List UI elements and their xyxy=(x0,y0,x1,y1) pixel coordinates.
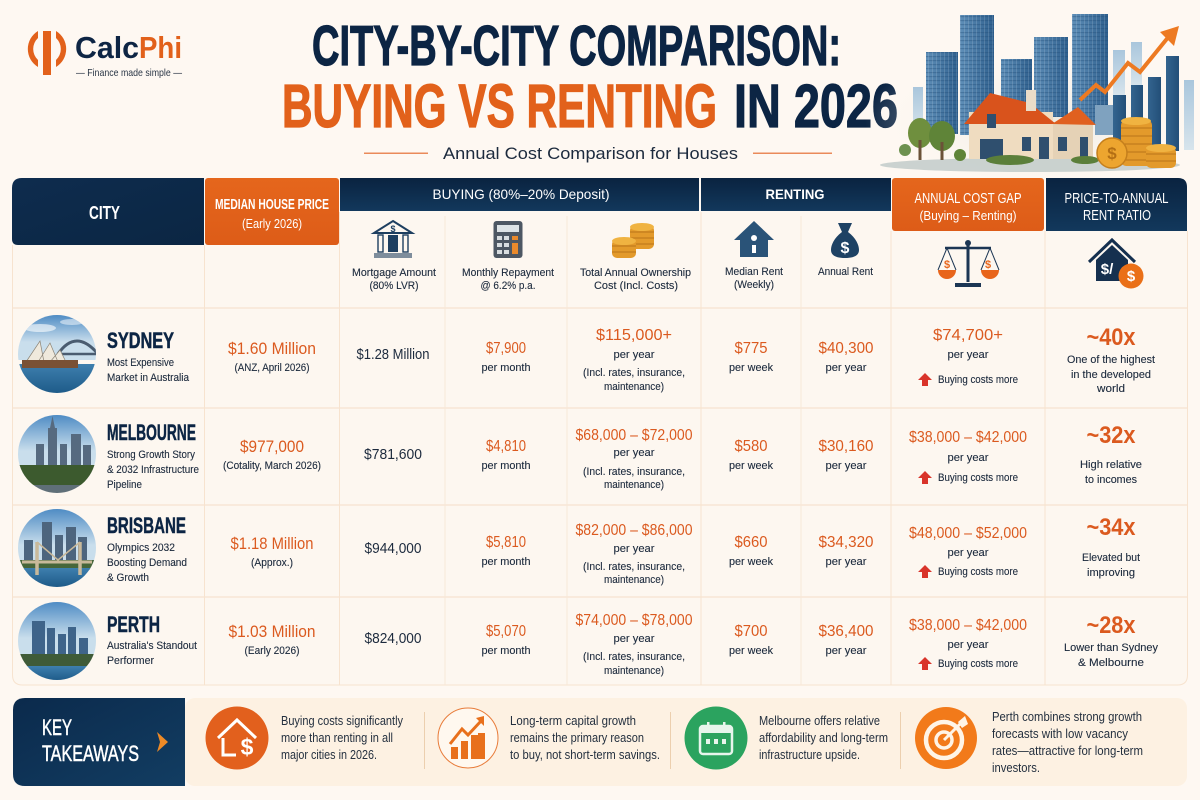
row: Perth: $700 xyxy=(734,623,768,640)
header: buying: BUYING (80%–20% Deposit) xyxy=(432,186,610,202)
row: Perth: $1.03 Million xyxy=(228,623,316,641)
CalcPhi logo: — Finance made simple — xyxy=(76,67,182,79)
sub-header labels: Cost (Incl. Costs) xyxy=(594,280,678,292)
row: Sydney: per year xyxy=(614,349,655,361)
row: Brisbane: (Incl. rates, insurance, xyxy=(583,561,685,573)
row: Perth: $38,000 – $42,000 xyxy=(909,617,1027,634)
row: Brisbane: $1.18 Million xyxy=(230,535,314,553)
row: Brisbane: $48,000 – $52,000 xyxy=(909,525,1027,542)
icon: balance scales xyxy=(938,240,999,287)
icon: balance scales: $ xyxy=(944,259,950,271)
row: Brisbane: $34,320 xyxy=(818,534,874,551)
row: Brisbane: improving xyxy=(1087,567,1135,579)
row: Perth: Buying costs more xyxy=(938,658,1018,670)
title: BUYING VS RENTING xyxy=(282,72,717,140)
row: Sydney: world xyxy=(1096,383,1125,395)
icon: money bag: $ xyxy=(841,240,850,257)
takeaway 3: affordability and long-term xyxy=(759,731,888,745)
row: Brisbane: $82,000 – $86,000 xyxy=(576,522,693,539)
row: Sydney: (Incl. rates, insurance, xyxy=(583,367,685,379)
row: Brisbane: maintenance) xyxy=(604,574,664,586)
sub-header labels: Mortgage Amount xyxy=(352,267,436,279)
title: CITY-BY-CITY COMPARISON: xyxy=(312,14,841,78)
row: Sydney: maintenance) xyxy=(604,381,664,393)
icon: bank: $ xyxy=(390,224,396,234)
row: Sydney: $115,000+ xyxy=(596,327,672,344)
takeaway 3: infrastructure upside. xyxy=(759,748,860,762)
row: Sydney: Most Expensive xyxy=(107,357,174,369)
takeaway 1: more than renting in all xyxy=(281,731,393,745)
icon: price to rent: $ xyxy=(1127,268,1136,285)
row: Brisbane: (Approx.) xyxy=(251,557,293,569)
row: Melbourne: Strong Growth Story xyxy=(107,449,195,461)
row: Perth: $36,400 xyxy=(818,623,874,640)
header: annual cost gap: (Buying – Renting) xyxy=(920,208,1016,223)
icon: rent house xyxy=(734,221,774,257)
row: Sydney: per year xyxy=(948,349,989,361)
takeaway 4: investors. xyxy=(992,761,1040,775)
row: Melbourne: (Incl. rates, insurance, xyxy=(583,466,685,478)
row: Melbourne: $4,810 xyxy=(486,438,526,455)
subtitle: Annual Cost Comparison for Houses xyxy=(443,144,738,163)
header: renting xyxy=(701,178,891,211)
takeaway 1: Buying costs significantly xyxy=(281,714,404,728)
row: Brisbane: Olympics 2032 xyxy=(107,542,175,554)
title xyxy=(282,14,898,140)
header: price-to-annual rent ratio xyxy=(1046,178,1187,231)
row: Sydney: $7,900 xyxy=(486,340,526,357)
row: Sydney: per year xyxy=(826,362,867,374)
header: city xyxy=(12,178,204,245)
sub-header labels: @ 6.2% p.a. xyxy=(480,280,536,292)
CalcPhi logo: Calc xyxy=(75,30,139,65)
sub-header labels: Total Annual Ownership xyxy=(580,267,691,279)
row: Brisbane: per year xyxy=(948,547,989,559)
sub-header labels: Monthly Repayment xyxy=(462,267,554,279)
row: Melbourne: (Cotality, March 2026) xyxy=(223,460,321,472)
header: annual cost gap: ANNUAL COST GAP xyxy=(914,191,1022,207)
sub-header labels: (80% LVR) xyxy=(370,280,418,292)
icon: price to rent: $/ xyxy=(1101,261,1114,278)
header: median house price: (Early 2026) xyxy=(242,216,302,231)
row: Brisbane: Elevated but xyxy=(1082,552,1140,564)
row: Brisbane: ~34x xyxy=(1086,514,1136,541)
row: Melbourne: $30,160 xyxy=(818,438,874,455)
sub-header labels: Median Rent xyxy=(725,266,783,278)
row: Perth: maintenance) xyxy=(604,665,664,677)
takeaway 1: $ xyxy=(241,734,254,760)
table body panel xyxy=(12,211,1188,685)
row: Brisbane xyxy=(18,509,1140,587)
row: Melbourne: $977,000 xyxy=(240,438,304,456)
row: Perth: per year xyxy=(826,645,867,657)
header: buying xyxy=(340,178,699,211)
row: Brisbane: $944,000 xyxy=(364,541,422,557)
takeaway 2: to buy, not short-term savings. xyxy=(510,748,660,762)
takeaway 2: Long-term capital growth xyxy=(510,714,636,728)
row: Melbourne: $68,000 – $72,000 xyxy=(576,427,693,444)
row: Brisbane: $660 xyxy=(734,534,768,551)
row: Sydney: $775 xyxy=(734,340,768,357)
row: Melbourne: $38,000 – $42,000 xyxy=(909,429,1027,446)
row: Melbourne: $580 xyxy=(734,438,768,455)
row: Brisbane: Boosting Demand xyxy=(107,557,187,569)
row: Brisbane: & Growth xyxy=(107,572,149,584)
row: Sydney: Buying costs more xyxy=(938,374,1018,386)
row: Perth: per month xyxy=(482,645,530,657)
row: Melbourne: to incomes xyxy=(1085,474,1137,486)
row: Sydney xyxy=(18,315,1155,395)
row: Brisbane: per year xyxy=(614,543,655,555)
sub-header labels: (Weekly) xyxy=(734,279,774,291)
header: price-to-annual rent ratio: RENT RATIO xyxy=(1083,208,1151,224)
row: Perth: Performer xyxy=(107,655,154,667)
takeaway 3: Melbourne offers relative xyxy=(759,714,880,728)
photo: Melbourne xyxy=(18,415,96,494)
row: Perth: Lower than Sydney xyxy=(1064,642,1158,654)
heading: key takeaways xyxy=(42,715,139,766)
row: Perth: $74,000 – $78,000 xyxy=(576,612,693,629)
row: Sydney: One of the highest xyxy=(1067,354,1155,366)
takeaway 4 xyxy=(915,707,1143,775)
row: Melbourne: per year xyxy=(948,452,989,464)
row: Melbourne: per week xyxy=(729,460,773,472)
icon: price to rent xyxy=(1089,240,1144,288)
row: Perth: $5,070 xyxy=(486,623,526,640)
row: Melbourne: maintenance) xyxy=(604,479,664,491)
row: Sydney: $1.28 Million xyxy=(356,347,430,363)
row: Melbourne: Buying costs more xyxy=(938,472,1018,484)
illustration: city skyline, house, coins xyxy=(865,14,1200,195)
row: Melbourne: per year xyxy=(614,447,655,459)
icon: coins xyxy=(612,223,654,258)
photo: Brisbane xyxy=(18,509,96,587)
heading: key takeaways: TAKEAWAYS xyxy=(42,741,139,766)
icon: money bag xyxy=(831,223,859,258)
row: Sydney: ~40x xyxy=(1086,324,1136,351)
CalcPhi logo: Phi xyxy=(139,30,182,65)
row: Melbourne: $781,600 xyxy=(364,447,422,463)
photo: Perth xyxy=(18,602,96,681)
row: Brisbane: Buying costs more xyxy=(938,566,1018,578)
arrow xyxy=(157,732,168,752)
row: Perth: PERTH xyxy=(107,612,160,637)
header: annual cost gap xyxy=(892,178,1044,231)
header: median house price: MEDIAN HOUSE PRICE xyxy=(215,196,329,213)
takeaway 1 xyxy=(206,706,404,770)
header: median house price xyxy=(205,178,339,245)
takeaway 4: forecasts with low vacancy xyxy=(992,727,1129,741)
takeaway 4: Perth combines strong growth xyxy=(992,710,1142,724)
row: Sydney: $74,700+ xyxy=(933,327,1003,344)
row: Sydney: SYDNEY xyxy=(107,328,174,353)
icon: balance scales: $ xyxy=(985,259,991,271)
row: Melbourne: per year xyxy=(826,460,867,472)
row: Perth: per week xyxy=(729,645,773,657)
illustration: city skyline, house, coins: $ xyxy=(1107,144,1117,163)
row: Brisbane: per month xyxy=(482,556,530,568)
title: IN 2026 xyxy=(734,72,898,140)
row: Melbourne: Pipeline xyxy=(107,479,142,491)
row: Melbourne: ~32x xyxy=(1086,422,1136,449)
icon: calculator xyxy=(494,221,522,258)
row: Sydney: per month xyxy=(482,362,530,374)
row: Sydney: (ANZ, April 2026) xyxy=(234,362,310,374)
row: Brisbane: per year xyxy=(826,556,867,568)
row: Perth: & Melbourne xyxy=(1078,657,1144,669)
row: Brisbane: $5,810 xyxy=(486,534,526,551)
takeaway 4: rates—attractive for long-term xyxy=(992,744,1143,758)
takeaway 3 xyxy=(684,706,888,770)
icon: bank xyxy=(374,221,412,258)
heading: key takeaways: KEY xyxy=(42,715,72,740)
photo: Sydney xyxy=(18,315,98,394)
row: Perth: (Early 2026) xyxy=(244,645,300,657)
sub-header labels xyxy=(352,266,873,292)
row: Perth: ~28x xyxy=(1086,612,1136,639)
row: Sydney: $40,300 xyxy=(818,340,874,357)
row: Sydney: $1.60 Million xyxy=(228,340,316,358)
row: Melbourne: per month xyxy=(482,460,530,472)
row: Melbourne: MELBOURNE xyxy=(107,420,196,445)
row: Sydney: in the developed xyxy=(1071,369,1151,381)
takeaway 1: major cities in 2026. xyxy=(281,748,377,762)
row: Brisbane: BRISBANE xyxy=(107,513,186,538)
header: renting: RENTING xyxy=(766,186,825,202)
row: Perth: per year xyxy=(948,639,989,651)
key takeaways band xyxy=(13,698,1187,786)
row: Melbourne xyxy=(18,415,1142,494)
row: Perth: Australia's Standout xyxy=(107,640,197,652)
row: Perth: $824,000 xyxy=(364,631,422,647)
row: Perth xyxy=(18,602,1158,681)
sub-header labels: Annual Rent xyxy=(818,266,873,278)
takeaway 2: remains the primary reason xyxy=(510,731,644,745)
row: Sydney: per week xyxy=(729,362,773,374)
header: city: CITY xyxy=(89,203,120,223)
header: price-to-annual rent ratio: PRICE-TO-ANNUAL xyxy=(1064,191,1168,207)
CalcPhi logo xyxy=(28,30,182,79)
row: Perth: per year xyxy=(614,633,655,645)
row: Perth: (Incl. rates, insurance, xyxy=(583,651,685,663)
row: Sydney: Market in Australia xyxy=(107,372,190,384)
row: Melbourne: & 2032 Infrastructure xyxy=(107,464,199,476)
row: Melbourne: High relative xyxy=(1080,459,1142,471)
row: Brisbane: per week xyxy=(729,556,773,568)
takeaway 2 xyxy=(438,708,660,768)
